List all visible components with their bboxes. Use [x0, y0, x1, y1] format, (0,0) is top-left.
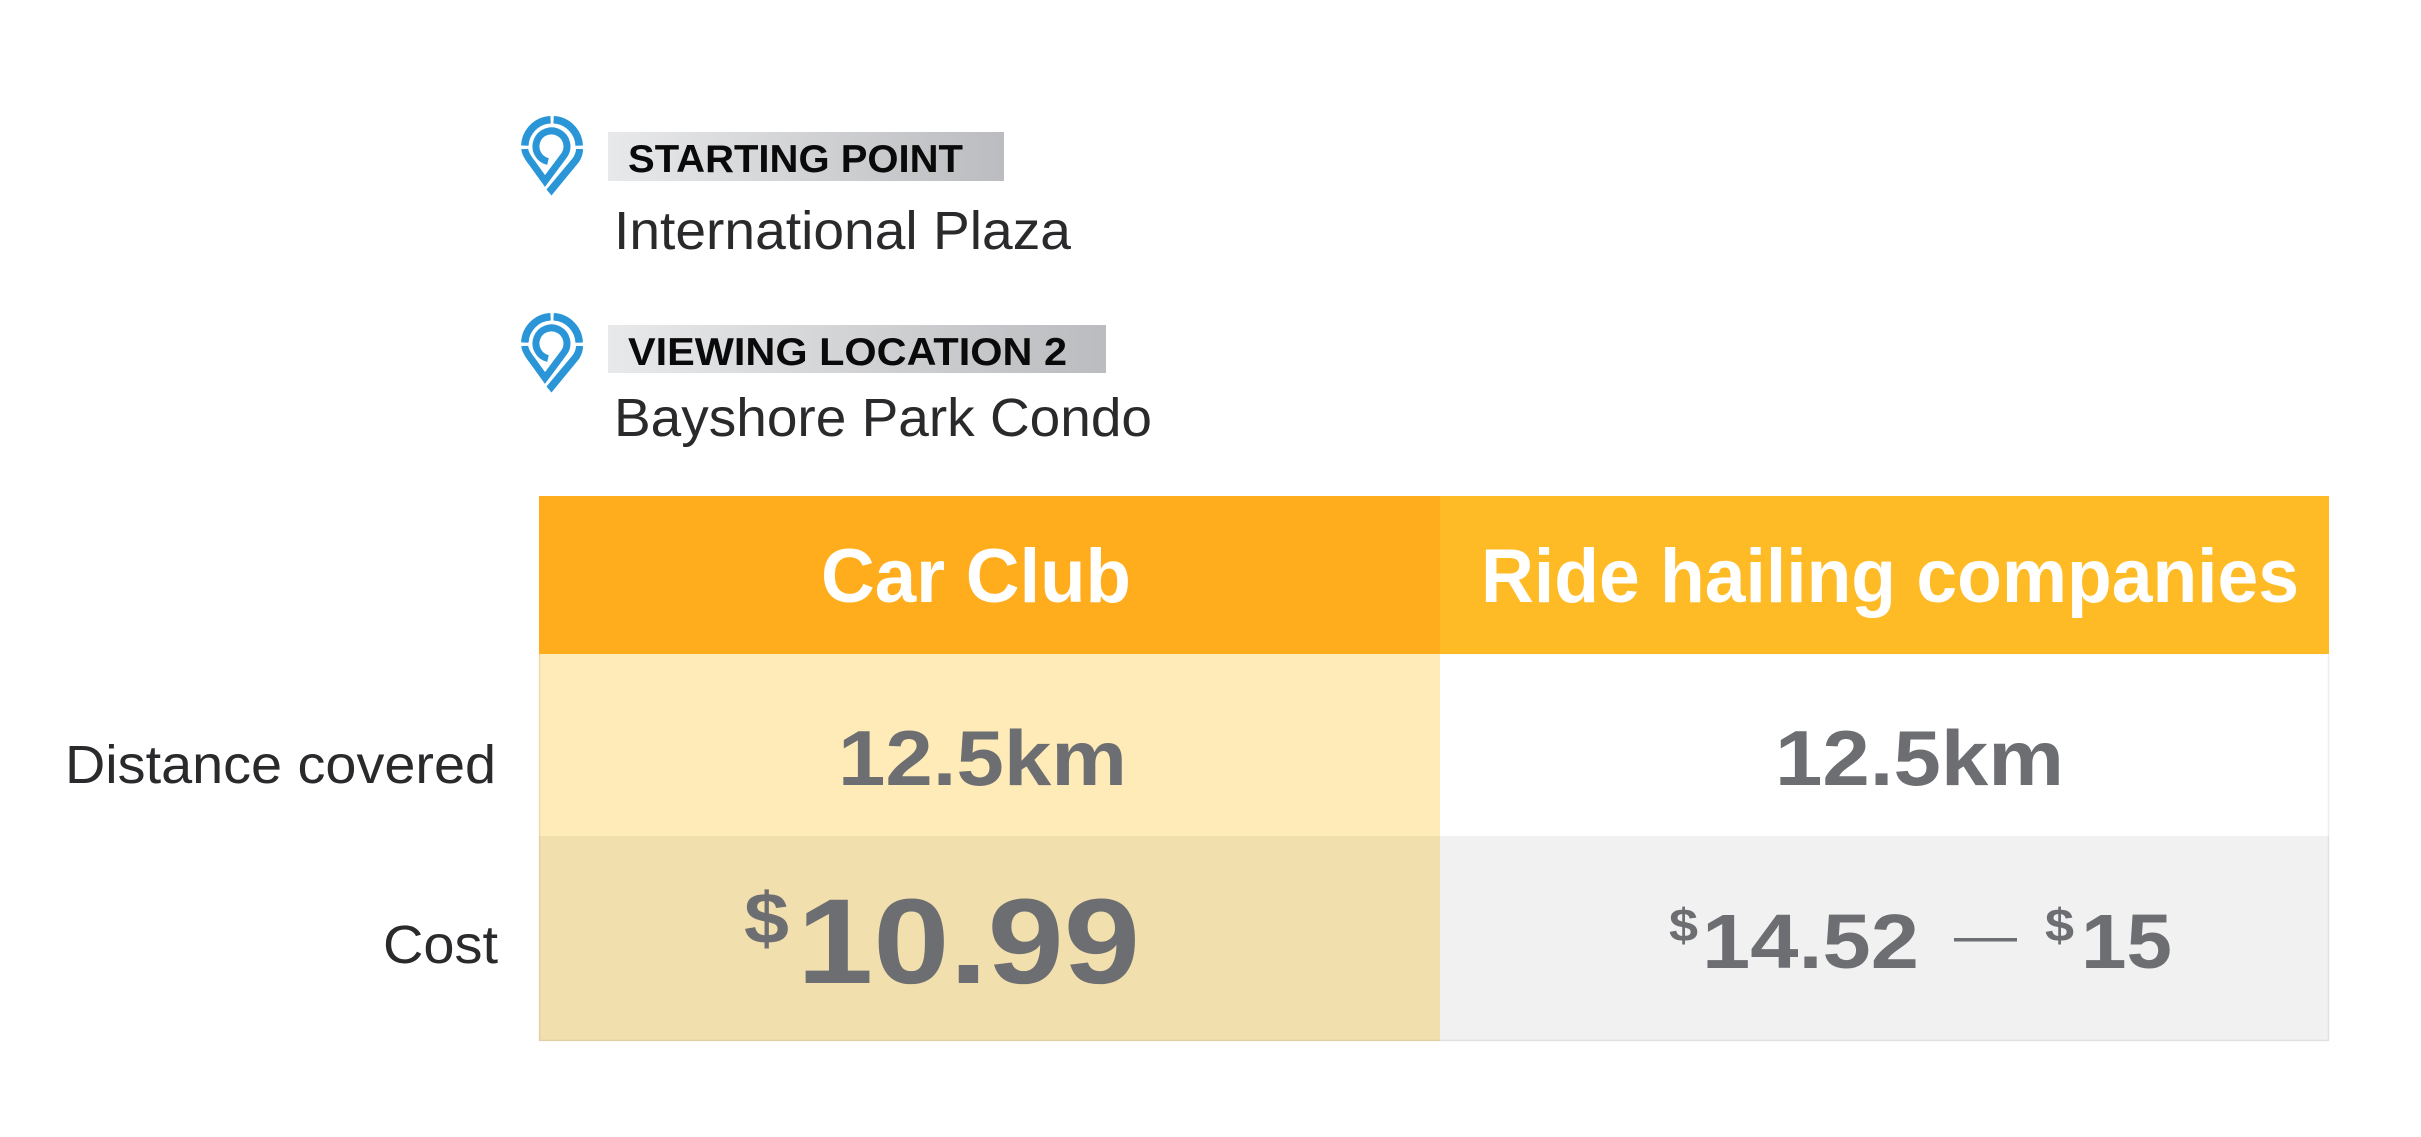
text: viewing location name: Bayshore Park Condo [614, 388, 1152, 448]
header: car club: Car Club [821, 534, 1131, 619]
cell: ride hailing cost [1440, 836, 2329, 1041]
cell: ride hailing distance [1440, 654, 2329, 836]
icon: location pin [525, 317, 583, 392]
column: ride hailing companies [1440, 496, 2329, 1041]
cell: car club distance: 12.5km [838, 714, 1127, 802]
cell: car club cost: 10.99 [797, 873, 1140, 1009]
column: car club [539, 496, 1440, 1041]
cell: ride hailing cost: 15 [2081, 899, 2172, 985]
tag: viewing location 2: VIEWING LOCATION 2 [628, 331, 1067, 374]
comparison table [539, 496, 2329, 1041]
row label: cost: Cost [383, 915, 498, 975]
section: viewing location 2 [525, 317, 1152, 448]
text: starting point name: International Plaza [614, 201, 1072, 261]
section: starting point [525, 120, 1072, 261]
icon: location pin [525, 120, 583, 196]
cell: car club cost [539, 836, 1440, 1041]
header: car club [539, 496, 1440, 654]
cell: ride hailing cost: $ [2045, 899, 2074, 951]
cell: car club cost: $ [744, 879, 789, 959]
row label: distance covered: Distance covered [65, 735, 496, 795]
header: ride hailing companies: Ride hailing companies [1481, 534, 2299, 619]
header: ride hailing companies [1440, 496, 2329, 654]
cell: car club distance [539, 654, 1440, 836]
cell: ride hailing cost: 14.52 [1702, 899, 1919, 985]
tag: starting point: STARTING POINT [628, 138, 963, 181]
cell: ride hailing cost: $ [1669, 899, 1698, 951]
cell: ride hailing distance: 12.5km [1775, 714, 2064, 802]
